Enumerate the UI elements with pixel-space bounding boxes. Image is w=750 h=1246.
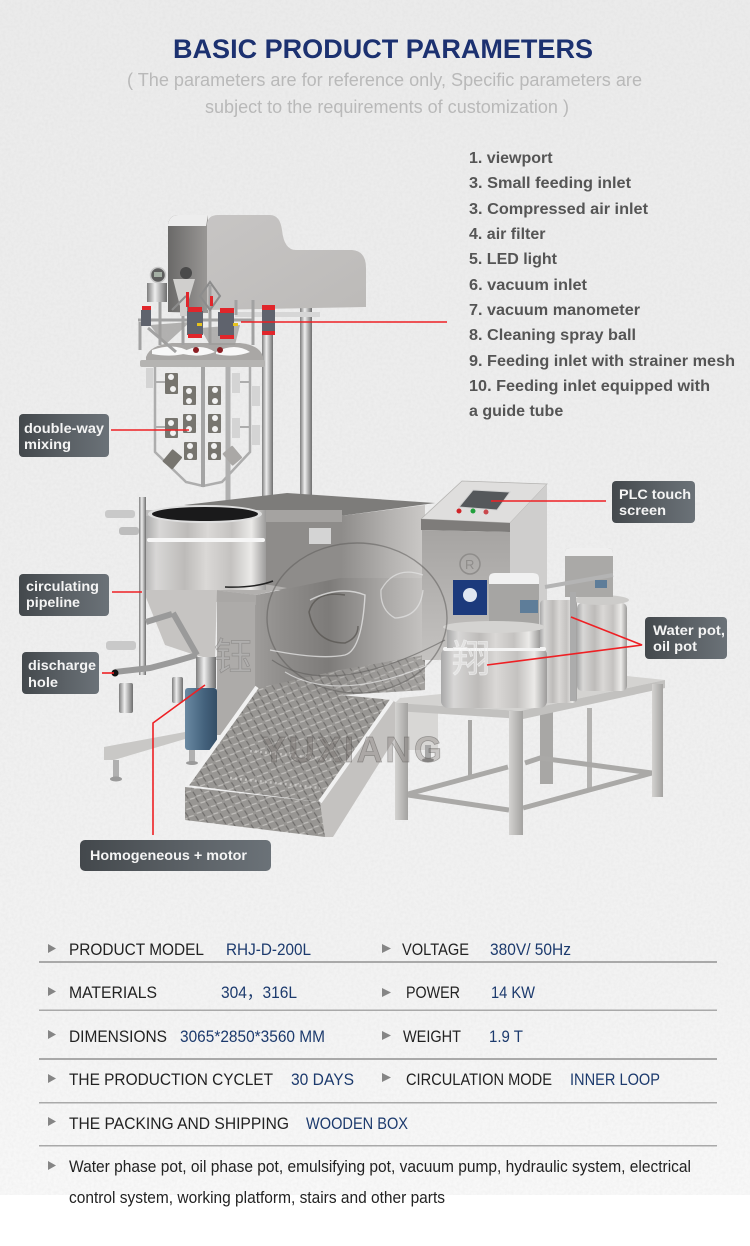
paddle frame bbox=[155, 366, 250, 505]
back pot bbox=[545, 548, 629, 691]
label: double-way mixing: mixing bbox=[24, 436, 71, 452]
label: PLC touch screen bbox=[612, 481, 695, 523]
subtitle note: ( The parameters are for reference only, Specific parameters are bbox=[127, 70, 642, 90]
row: model and voltage bbox=[69, 940, 571, 959]
label: water pot, oil pot bbox=[645, 617, 727, 659]
row: model and voltage: PRODUCT MODEL bbox=[69, 940, 204, 959]
row: packing: THE PACKING AND SHIPPING bbox=[69, 1114, 289, 1133]
parts list bbox=[469, 150, 735, 420]
row: materials and power: MATERIALS bbox=[69, 983, 157, 1002]
row: scope of supply bbox=[69, 1157, 691, 1207]
leader line: fittings to parts list bbox=[241, 321, 447, 323]
row arrows bbox=[48, 944, 391, 1170]
row: cycle and circulation: THE PRODUCTION CYCLET bbox=[69, 1070, 273, 1089]
leader line: discharge bbox=[102, 672, 114, 674]
parts list: 4. air filter bbox=[469, 226, 545, 243]
row: scope of supply: Water phase pot, oil phase pot, emulsifying pot, vacuum pump, hydraulic system, electrical bbox=[69, 1157, 691, 1176]
leader line: touch screen bbox=[491, 500, 606, 502]
row dividers bbox=[39, 961, 717, 1146]
valves and fittings bbox=[138, 268, 275, 352]
row: model and voltage: RHJ-D-200L bbox=[226, 940, 311, 959]
brand watermark text bbox=[214, 637, 490, 770]
row: dimensions and weight bbox=[69, 1027, 523, 1046]
row: cycle and circulation: 30 DAYS bbox=[291, 1070, 354, 1089]
machine illustration bbox=[104, 215, 665, 837]
logo watermark bbox=[267, 543, 447, 693]
stairs bbox=[185, 687, 400, 837]
control cabinet with touch screen: R bbox=[465, 557, 474, 572]
parts list: 5. LED light bbox=[469, 251, 558, 268]
leader line: mixing bbox=[111, 429, 189, 431]
label: circulating pipeline: circulating bbox=[26, 578, 99, 594]
circulating pipework bbox=[105, 497, 197, 713]
row: materials and power: 14 KW bbox=[491, 983, 535, 1002]
row: cycle and circulation: INNER LOOP bbox=[570, 1070, 660, 1089]
rear base box bbox=[400, 702, 438, 762]
brand watermark text: 钰 bbox=[214, 637, 252, 679]
row: dimensions and weight: WEIGHT bbox=[403, 1027, 461, 1046]
main vessel bbox=[141, 505, 273, 660]
leader line: motor bbox=[153, 685, 205, 835]
pots on stand bbox=[395, 548, 665, 835]
scraper paddles bbox=[146, 368, 260, 470]
label: PLC touch screen: PLC touch bbox=[619, 486, 691, 502]
row: dimensions and weight: 1.9 T bbox=[489, 1027, 523, 1046]
label: discharge hole: hole bbox=[28, 674, 58, 690]
brand watermark text: YUXIANG bbox=[262, 729, 442, 770]
parts list: 9. Feeding inlet with strainer mesh bbox=[469, 353, 735, 370]
specification table bbox=[39, 940, 717, 1207]
label: water pot, oil pot: Water pot, bbox=[653, 622, 725, 638]
vessel lid bbox=[140, 343, 265, 367]
parts list: a guide tube bbox=[469, 403, 563, 420]
label: water pot, oil pot: oil pot bbox=[653, 638, 697, 654]
parts list: 3. Small feeding inlet bbox=[469, 175, 632, 192]
label: homogeneous + motor: Homogeneous + motor bbox=[90, 847, 248, 863]
brand watermark text: 翔 bbox=[452, 639, 490, 681]
subtitle note: subject to the requirements of customization ) bbox=[205, 97, 569, 117]
label: discharge hole: discharge bbox=[28, 657, 96, 673]
row: materials and power: POWER bbox=[406, 983, 460, 1002]
leader lines: pots bbox=[487, 617, 642, 665]
leader line: pipeline bbox=[112, 591, 142, 593]
parts list: 10. Feeding inlet equipped with bbox=[469, 378, 710, 395]
row: model and voltage: VOLTAGE bbox=[402, 940, 469, 959]
row: dimensions and weight: 3065*2850*3560 MM bbox=[180, 1027, 325, 1046]
row: cycle and circulation: CIRCULATION MODE bbox=[406, 1070, 552, 1089]
label: double-way mixing: double-way bbox=[24, 420, 104, 436]
emulsifying cabinet bbox=[184, 493, 435, 735]
label: PLC touch screen: screen bbox=[619, 502, 666, 518]
row: materials and power bbox=[69, 983, 535, 1002]
homogeneous motor bbox=[185, 657, 217, 765]
middle pot bbox=[540, 592, 577, 703]
row: dimensions and weight: DIMENSIONS bbox=[69, 1027, 167, 1046]
parts list: 3. Compressed air inlet bbox=[469, 201, 649, 218]
row: scope of supply: control system, working platform, stairs and other parts bbox=[69, 1188, 445, 1207]
parts list: 6. vacuum inlet bbox=[469, 277, 588, 294]
front pot bbox=[441, 573, 547, 708]
parts list: 7. vacuum manometer bbox=[469, 302, 640, 319]
row: model and voltage: 380V/ 50Hz bbox=[490, 940, 571, 959]
row: packing: WOODEN BOX bbox=[306, 1114, 408, 1133]
label: circulating pipeline bbox=[19, 574, 109, 616]
stand bbox=[395, 676, 665, 835]
control cabinet with touch screen bbox=[421, 481, 547, 660]
row: materials and power: 304，316L bbox=[221, 983, 297, 1002]
mixer head housing bbox=[168, 215, 366, 313]
lifting columns bbox=[235, 308, 320, 504]
row: cycle and circulation bbox=[69, 1070, 660, 1089]
subtitle note bbox=[127, 70, 642, 117]
parts list: 8. Cleaning spray ball bbox=[469, 327, 636, 344]
label: homogeneous + motor bbox=[80, 840, 271, 871]
label: discharge hole bbox=[22, 652, 99, 694]
label: circulating pipeline: pipeline bbox=[26, 594, 80, 610]
parts list: 1. viewport bbox=[469, 150, 553, 167]
support beam bbox=[104, 732, 185, 782]
label: double-way mixing bbox=[19, 414, 109, 457]
title: BASIC PRODUCT PARAMETERS bbox=[173, 34, 593, 64]
